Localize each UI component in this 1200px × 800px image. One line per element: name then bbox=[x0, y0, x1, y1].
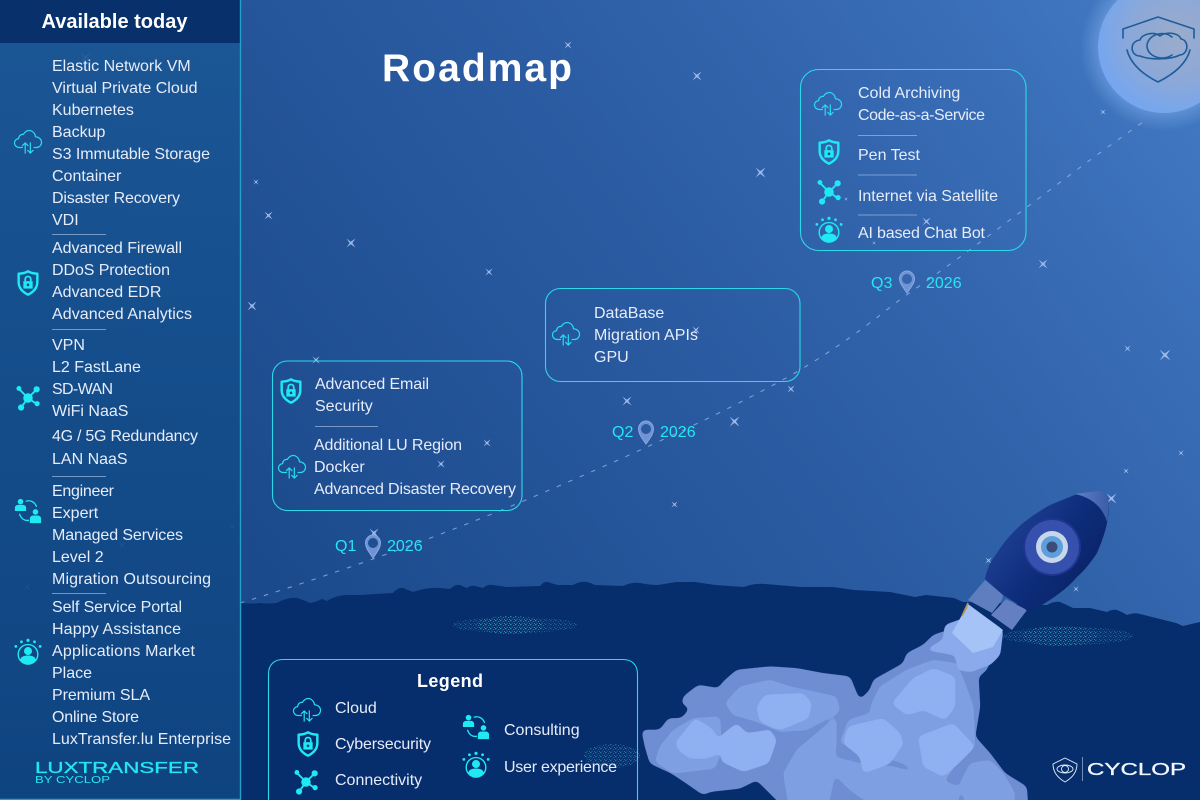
user experience list bbox=[14, 599, 231, 748]
legend: user experience: User experience bbox=[504, 759, 617, 776]
cloud services list: VDI bbox=[52, 212, 79, 229]
ground silhouette bbox=[240, 582, 1200, 800]
card: Q1 2026: Additional LU Region bbox=[314, 437, 462, 454]
card: Q2 2026 bbox=[546, 288, 800, 382]
stars bbox=[24, 41, 1184, 592]
milestone: Q1 2026: Q1 bbox=[335, 538, 356, 555]
cloud services list bbox=[14, 58, 210, 229]
connectivity list: VPN bbox=[52, 337, 85, 354]
cloud services list: Backup bbox=[52, 124, 105, 141]
card: Q3 2026: Cold Archiving bbox=[858, 85, 960, 102]
milestone: Q3 2026 bbox=[871, 271, 962, 293]
legend: user experience bbox=[462, 752, 617, 777]
user experience list: Applications Market bbox=[52, 643, 196, 660]
cloud services list: Elastic Network VM bbox=[52, 58, 191, 75]
legend heading: Legend bbox=[417, 671, 483, 691]
card: Q3 2026 bbox=[800, 70, 1026, 250]
connectivity list bbox=[16, 337, 198, 468]
luxtransfer logo: LUXTRANSFER bbox=[35, 760, 199, 777]
cybersecurity list: Advanced Firewall bbox=[52, 240, 182, 257]
legend: connectivity bbox=[294, 770, 422, 795]
luxtransfer logo bbox=[35, 760, 199, 786]
cloud services list: Container bbox=[52, 168, 122, 185]
milestone: Q3 2026: Q3 bbox=[871, 275, 892, 292]
card: Q1 2026: Security bbox=[315, 398, 373, 415]
luxtransfer logo: BY CYCLOP bbox=[35, 774, 110, 786]
cybersecurity list: Advanced Analytics bbox=[52, 306, 192, 323]
consulting list: Engineer bbox=[52, 483, 115, 500]
cybersecurity list: Advanced EDR bbox=[52, 284, 161, 301]
milestone: Q1 2026 bbox=[335, 535, 423, 558]
cyclop logo: CYCLOP bbox=[1087, 759, 1186, 779]
card: Q1 2026: Advanced Email bbox=[315, 376, 429, 393]
dashed trajectory bbox=[240, 122, 1143, 603]
milestone: Q3 2026: 2026 bbox=[926, 275, 962, 292]
left panel: available today bbox=[0, 0, 240, 800]
card: Q2 2026: Migration APIs bbox=[594, 327, 698, 344]
cybersecurity list: DDoS Protection bbox=[52, 262, 170, 279]
milestone: Q2 2026: Q2 bbox=[612, 424, 633, 441]
card: Q1 2026: Docker bbox=[314, 459, 365, 476]
milestone: Q2 2026 bbox=[612, 421, 696, 444]
card: Q3 2026: Pen Test bbox=[858, 147, 921, 164]
card: Q3 2026: AI based Chat Bot bbox=[858, 225, 986, 242]
user experience list: Self Service Portal bbox=[52, 599, 182, 616]
cybersecurity list bbox=[19, 240, 192, 323]
smoke cloud bbox=[642, 610, 1028, 800]
consulting list bbox=[15, 483, 211, 588]
consulting list: Managed Services bbox=[52, 527, 183, 544]
milestone: Q1 2026: 2026 bbox=[387, 538, 423, 555]
user experience list: Premium SLA bbox=[52, 687, 150, 704]
cyclop logo bbox=[1053, 757, 1186, 782]
consulting list: Level 2 bbox=[52, 549, 104, 566]
consulting list: Expert bbox=[52, 505, 99, 522]
cloud services list: Disaster Recovery bbox=[52, 190, 180, 207]
legend: connectivity: Connectivity bbox=[335, 772, 422, 789]
legend: cloud: Cloud bbox=[335, 700, 377, 717]
cloud services list: Virtual Private Cloud bbox=[52, 80, 198, 97]
connectivity list: SD-WAN bbox=[52, 381, 113, 398]
cloud services list: S3 Immutable Storage bbox=[52, 146, 210, 163]
legend: cloud bbox=[293, 698, 377, 721]
milestone: Q2 2026: 2026 bbox=[660, 424, 696, 441]
legend: cybersecurity bbox=[299, 732, 431, 756]
user experience list: Place bbox=[52, 665, 92, 682]
card: Q2 2026: DataBase bbox=[594, 305, 664, 322]
card: Q2 2026: GPU bbox=[594, 349, 629, 366]
user experience list: LuxTransfer.lu Enterprise bbox=[52, 731, 231, 748]
dotted haze patches bbox=[0, 616, 1134, 768]
title: Roadmap bbox=[382, 47, 572, 90]
consulting list: Migration Outsourcing bbox=[52, 571, 211, 588]
user experience list: Happy Assistance bbox=[52, 621, 181, 638]
legend: consulting: Consulting bbox=[504, 722, 580, 739]
card: Q3 2026: Internet via Satellite bbox=[858, 188, 998, 205]
moon with shield logo bbox=[1080, 0, 1200, 131]
card: Q1 2026 bbox=[272, 361, 522, 510]
connectivity list: LAN NaaS bbox=[52, 451, 128, 468]
card: Q1 2026: Advanced Disaster Recovery bbox=[314, 481, 516, 498]
panel heading: Available today bbox=[42, 11, 188, 33]
user experience list: Online Store bbox=[52, 709, 139, 726]
connectivity list: WiFi NaaS bbox=[52, 403, 128, 420]
rocket bbox=[952, 490, 1109, 653]
legend: cybersecurity: Cybersecurity bbox=[335, 736, 431, 753]
legend bbox=[268, 660, 638, 800]
connectivity list: 4G / 5G Redundancy bbox=[52, 428, 198, 445]
connectivity list: L2 FastLane bbox=[52, 359, 141, 376]
legend: consulting bbox=[463, 715, 580, 739]
card: Q3 2026: Code-as-a-Service bbox=[858, 107, 985, 124]
cloud services list: Kubernetes bbox=[52, 102, 134, 119]
